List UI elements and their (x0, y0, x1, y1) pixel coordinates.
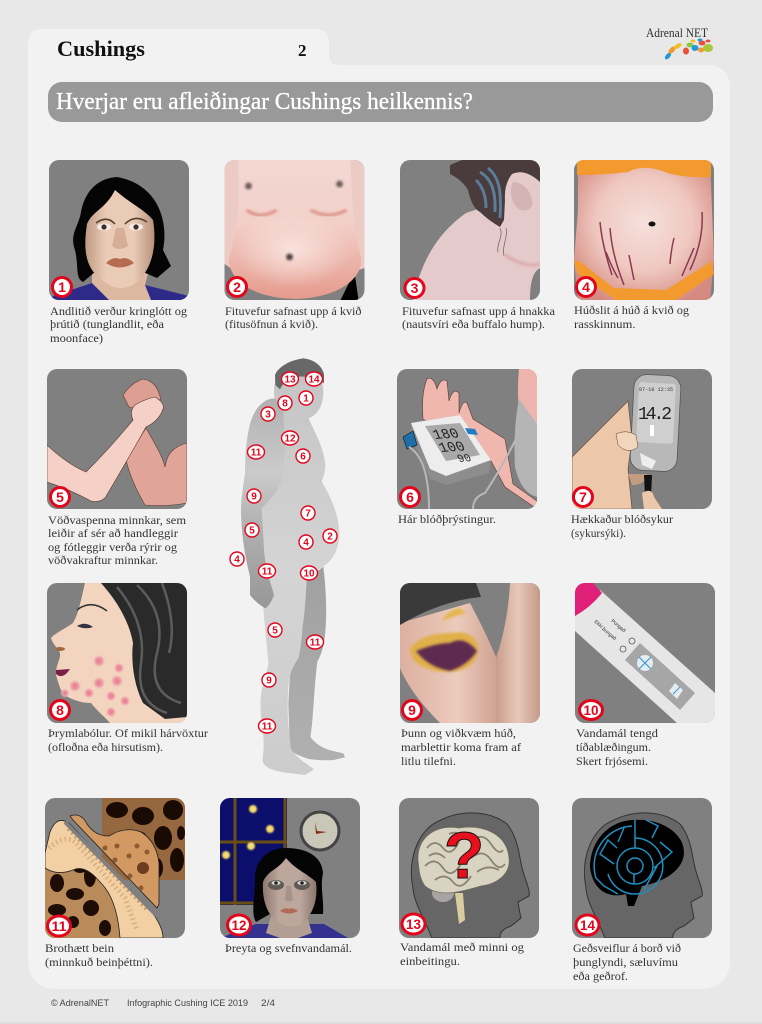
badge 3 (405, 278, 424, 298)
caption 14: Geðsveiflur á borð við (573, 941, 681, 955)
illustration: blood pressure monitor: 90 (456, 454, 474, 466)
caption 6: Hár blóðþrýstingur. (398, 512, 496, 526)
caption 8: (ofloðna eða hirsutism). (48, 740, 163, 754)
panel: 14 mood disorders (572, 798, 712, 983)
badge 2 (228, 278, 246, 296)
caption 8: Þrymlabólur. Of mikil hárvöxtur (48, 726, 208, 740)
caption 9: marblettir koma fram af (401, 740, 521, 754)
illustration: bone cross-section (45, 798, 185, 938)
caption 8 (48, 726, 208, 754)
panel: 3 buffalo hump (400, 160, 556, 331)
caption 12: Þreyta og svefnvandamál. (225, 941, 352, 955)
caption 5: og fótleggir verða rýrir og (48, 540, 177, 554)
badge 7 (574, 488, 592, 506)
caption 1 (50, 304, 187, 345)
badge 1 (52, 278, 72, 296)
badge 1: 1 (58, 279, 66, 295)
caption 10: tíðablæðingum. (576, 740, 651, 754)
panel: 11 brittle bones (45, 798, 185, 969)
panel: 1 moon face (49, 160, 189, 345)
footer: Infographic Cushing ICE 2019 (127, 998, 248, 1009)
caption 2: Fituvefur safnast upp á kvið (225, 304, 362, 318)
caption 11: Brothætt bein (45, 941, 114, 955)
panel: 10 menstrual problems (575, 583, 715, 768)
badge 7: 7 (579, 489, 587, 505)
body markers: 10 (303, 568, 315, 580)
caption 5: leiðir af sér að handleggir (48, 526, 178, 540)
heading bar (48, 82, 713, 122)
body markers: 7 (305, 508, 311, 520)
caption 7: Hækkaður blóðsykur (571, 512, 673, 526)
caption 3 (402, 304, 556, 331)
caption 4 (574, 303, 689, 331)
caption 5 (48, 513, 187, 567)
body markers: 9 (251, 492, 257, 502)
badge 13 (402, 914, 425, 934)
badge 12: 12 (232, 917, 247, 933)
badge 14 (576, 915, 599, 935)
body markers: 4 (234, 554, 240, 566)
caption 10 (576, 726, 658, 768)
caption 13: Vandamál með minni og (400, 940, 524, 954)
body markers: 13 (284, 374, 296, 386)
caption 7: (sykursýki). (571, 526, 626, 540)
illustration: blood pressure monitor (397, 369, 537, 509)
logo: AdrenalNET (646, 26, 713, 60)
body markers: 2 (327, 532, 333, 542)
body silhouette (241, 358, 345, 775)
body markers: 3 (265, 410, 271, 420)
caption 9: Þunn og viðkvæm húð, (401, 726, 516, 740)
caption 14: eða geðrof. (573, 969, 628, 983)
body markers: 11 (262, 722, 273, 732)
illustration: bruised thigh (400, 583, 540, 723)
panel: 5 muscle weakness (47, 369, 187, 567)
body markers: 5 (249, 526, 255, 536)
badge 9: 9 (408, 702, 416, 718)
badge 8 (50, 700, 70, 720)
badge 11 (48, 916, 70, 936)
illustration: glucose meter (572, 369, 712, 509)
panel: 4 stretch marks (574, 160, 714, 331)
badge 5: 5 (56, 489, 64, 505)
panel: 8 acne and hirsutism (47, 583, 208, 754)
body markers: 11 (251, 448, 262, 458)
caption 3: Fituvefur safnast upp á hnakka (402, 304, 556, 318)
caption 4: Húðslit á húð á kvið og (574, 303, 689, 317)
badge 2: 2 (233, 279, 241, 295)
badge 4: 4 (582, 279, 590, 295)
illustration: head with maze brain (572, 798, 712, 938)
body markers: 9 (266, 676, 272, 686)
central figure: body map with numbered markers (230, 358, 345, 775)
panel: 6 high blood pressure (397, 369, 537, 526)
illustration: arm wrestling (47, 369, 187, 509)
caption 5: vöðvakraftur minnkar. (48, 553, 158, 567)
badge 13: 13 (406, 916, 421, 932)
caption 11: (minnkuð beinþéttni). (45, 955, 153, 969)
badge 4 (576, 278, 596, 296)
illustration: pregnancy test: Þungað (610, 617, 627, 634)
caption 10: Skert frjósemi. (576, 754, 648, 768)
heading bar: Hverjar eru afleiðingar Cushings heilkennis? (56, 89, 473, 115)
panel: 12 fatigue and sleep (220, 798, 360, 955)
badge 11: 11 (52, 918, 67, 934)
body markers: 4 (303, 538, 309, 548)
badge 5 (50, 488, 70, 506)
caption 10: Vandamál tengd (576, 726, 658, 740)
badge 8: 8 (56, 702, 64, 718)
caption 11 (45, 941, 153, 969)
illustration: round face (49, 160, 189, 300)
caption 14 (573, 941, 681, 983)
illustration: tired woman at night (220, 798, 360, 938)
illustration: pregnancy test: Ekki þungað (593, 618, 618, 642)
caption 14: þunglyndi, sæluvímu (573, 955, 678, 969)
panel: 2 abdominal fat (224, 160, 364, 331)
illustration: head with brain and question mark: ? (444, 818, 484, 892)
caption 2 (225, 304, 362, 331)
logo: AdrenalNET: Adrenal NET (646, 26, 708, 40)
caption 2: (fitusöfnun á kvið). (225, 317, 318, 331)
footer: © AdrenalNET (51, 998, 109, 1009)
caption 4: rasskinnum. (574, 317, 636, 331)
badge 9 (402, 700, 422, 720)
panel: 13 memory problems (399, 798, 539, 968)
caption 1: Andlitið verður kringlótt og (50, 304, 187, 318)
tab title: Cushings (57, 36, 145, 61)
illustration: glucose meter: 14.2 (638, 405, 672, 425)
badge 3: 3 (411, 280, 419, 296)
badge 10 (580, 700, 602, 720)
caption 5: Vöðvaspenna minnkar, sem (48, 513, 187, 527)
badge 6 (400, 488, 420, 506)
body markers: 5 (272, 626, 278, 636)
footer (51, 998, 275, 1009)
caption 1: þrútið (tunglandlit, eða (50, 317, 165, 331)
caption 9: litlu tilefni. (401, 754, 456, 768)
body markers: 12 (284, 434, 296, 444)
illustration: neck hump (400, 160, 540, 300)
illustration: glucose meter: 07-10 12:35 (639, 387, 673, 393)
body markers: 8 (282, 398, 288, 410)
body markers: 6 (300, 452, 306, 462)
badge 12 (228, 915, 250, 935)
illustration: pregnancy test (575, 583, 715, 723)
illustration: belly (224, 160, 364, 300)
caption 1: moonface) (50, 331, 103, 345)
body markers: 11 (310, 638, 321, 648)
badge 6: 6 (406, 489, 414, 505)
panel: 9 bruising (400, 583, 540, 768)
illustration: woman profile with acne (47, 583, 187, 723)
illustration: head with brain and question mark (399, 798, 539, 938)
body markers: 11 (262, 566, 273, 578)
body markers (230, 372, 337, 733)
caption 3: (nautsvíri eða buffalo hump). (402, 317, 545, 331)
badge 14: 14 (580, 917, 595, 933)
caption 13 (400, 940, 524, 968)
badge 10: 10 (584, 702, 599, 718)
illustration: striae on abdomen (574, 160, 714, 300)
body markers: 1 (303, 394, 309, 404)
page number: 2 (298, 41, 306, 60)
footer: 2/4 (261, 998, 275, 1009)
body markers: 14 (308, 374, 320, 386)
illustration: blood pressure monitor: 100 (436, 440, 468, 457)
panel: 7 high blood sugar (571, 369, 712, 540)
caption 13: einbeitingu. (400, 954, 460, 968)
caption 7 (571, 512, 673, 540)
illustration: blood pressure monitor: 180 (430, 427, 462, 444)
caption 9 (401, 726, 521, 768)
